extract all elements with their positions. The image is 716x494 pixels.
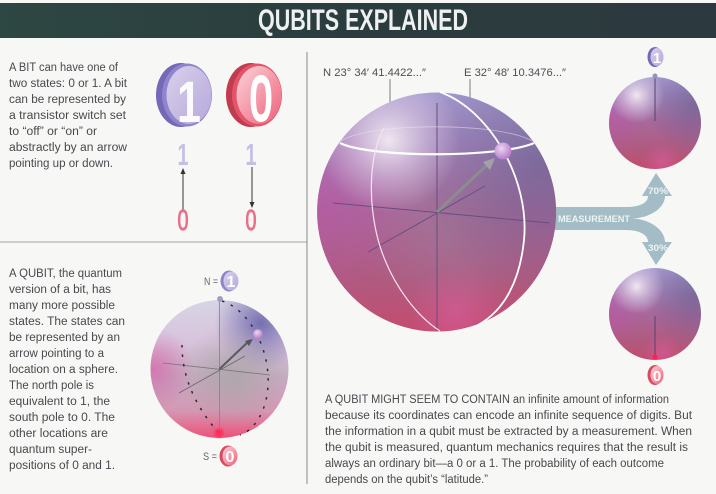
panel: bit explanation text: [9, 62, 128, 170]
icon: coin showing 0: [226, 63, 282, 134]
label: north pole equals 1: 1: [227, 274, 236, 291]
panel: qubit explanation text: states. The states can: [9, 316, 125, 328]
title banner: QUBITS EXPLAINED: [258, 4, 468, 37]
panel: qubit explanation text: arrow pointing to a: [9, 348, 105, 360]
panel: qubit explanation text: location on a sphere.: [9, 364, 118, 376]
diagram: bit arrow pointing down: 0: [246, 205, 256, 237]
panel: bit explanation text: A BIT can have one of: [9, 62, 119, 74]
icon: coin showing 0: 0: [250, 65, 272, 134]
diagram: sphere measured as 0: [609, 268, 701, 360]
diagram: bit arrow pointing down: [246, 137, 256, 237]
panel: qubit explanation text: A QUBIT, the quantum: [9, 268, 122, 280]
panel: qubit explanation text: version of a bit, has: [9, 284, 111, 296]
panel: bit explanation text: to “off” or “on” or: [9, 126, 97, 138]
diagram: sphere measured as 1: [609, 74, 701, 169]
icon: coin showing 1: [156, 63, 212, 135]
diagram: qubit sphere: [150, 296, 288, 438]
text block: measurement explanation: depends on the qubit’s “latitude.”: [325, 474, 488, 486]
panel: qubit explanation text: The north pole is: [9, 380, 94, 392]
text block: measurement explanation: the qubit is measured, quantum mechanics requires that the result is: [325, 442, 688, 454]
diagram: bit arrow pointing up: [178, 137, 188, 237]
panel: qubit explanation text: many more possible: [9, 300, 115, 312]
icon: coin 1 above top sphere: [648, 47, 664, 67]
text block: measurement explanation: A QUBIT MIGHT SEEM TO CONTAIN an infinite amount of information: [325, 394, 669, 406]
panel: qubit explanation text: be represented by an: [9, 332, 120, 344]
panel: bit explanation text: two states: 0 or 1. A bit: [9, 78, 128, 90]
label: longitude coordinate: E 32° 48′ 10.3476...″: [464, 67, 566, 79]
arrow: measurement branching to outcomes: [552, 173, 672, 265]
label: latitude coordinate: [323, 67, 426, 153]
label: north pole equals 1: N =: [204, 276, 218, 288]
text block: measurement explanation: because its coordinates can encode an infinite sequence of digits. But: [325, 410, 693, 422]
icon: coin 0 below bottom sphere: 0: [653, 368, 661, 385]
label: south pole equals 0: S =: [203, 451, 217, 463]
label: south pole equals 0: [203, 446, 238, 466]
diagram: bit arrow pointing down: 1: [246, 137, 256, 172]
text block: measurement explanation: always an ordinary bit—a 0 or a 1. The probability of each outcome: [325, 458, 664, 470]
diagram: bit arrow pointing up: 0: [178, 205, 188, 237]
label: latitude coordinate: N 23° 34′ 41.4422...″: [323, 67, 426, 79]
icon: coin 1 above top sphere: 1: [653, 50, 661, 67]
text block: measurement explanation: the information in a qubit must be extracted by a measurement. When: [325, 426, 692, 438]
diagram: bit arrow pointing up: 1: [178, 137, 188, 172]
arrow: measurement branching to outcomes: 30%: [648, 243, 669, 254]
panel: bit explanation text: can be represented by: [9, 94, 126, 106]
icon: coin showing 1: 1: [177, 70, 201, 135]
panel: qubit explanation text: south pole to 0. The: [9, 412, 115, 424]
panel: qubit explanation text: quantum super-: [9, 444, 92, 456]
text block: measurement explanation: [325, 394, 693, 486]
panel: bit explanation text: a transistor switch set: [9, 110, 127, 122]
panel: bit explanation text: abstractly by an arrow: [9, 142, 128, 154]
panel: bit explanation text: pointing up or down.: [9, 158, 113, 170]
arrow: measurement branching to outcomes: MEASUREMENT: [558, 214, 630, 225]
label: south pole equals 0: 0: [226, 449, 235, 466]
panel: qubit explanation text: other locations are: [9, 428, 108, 440]
title banner: [0, 3, 716, 38]
icon: coin 0 below bottom sphere: [648, 365, 664, 385]
label: longitude coordinate: [464, 67, 566, 104]
panel: qubit explanation text: positions of 0 and 1.: [9, 460, 115, 472]
panel: qubit explanation text: [9, 268, 125, 472]
panel: qubit explanation text: equivalent to 1, the: [9, 396, 110, 408]
label: north pole equals 1: [204, 270, 238, 292]
arrow: measurement branching to outcomes: 70%: [648, 186, 669, 197]
diagram: large qubit sphere with coordinates: [317, 92, 556, 332]
